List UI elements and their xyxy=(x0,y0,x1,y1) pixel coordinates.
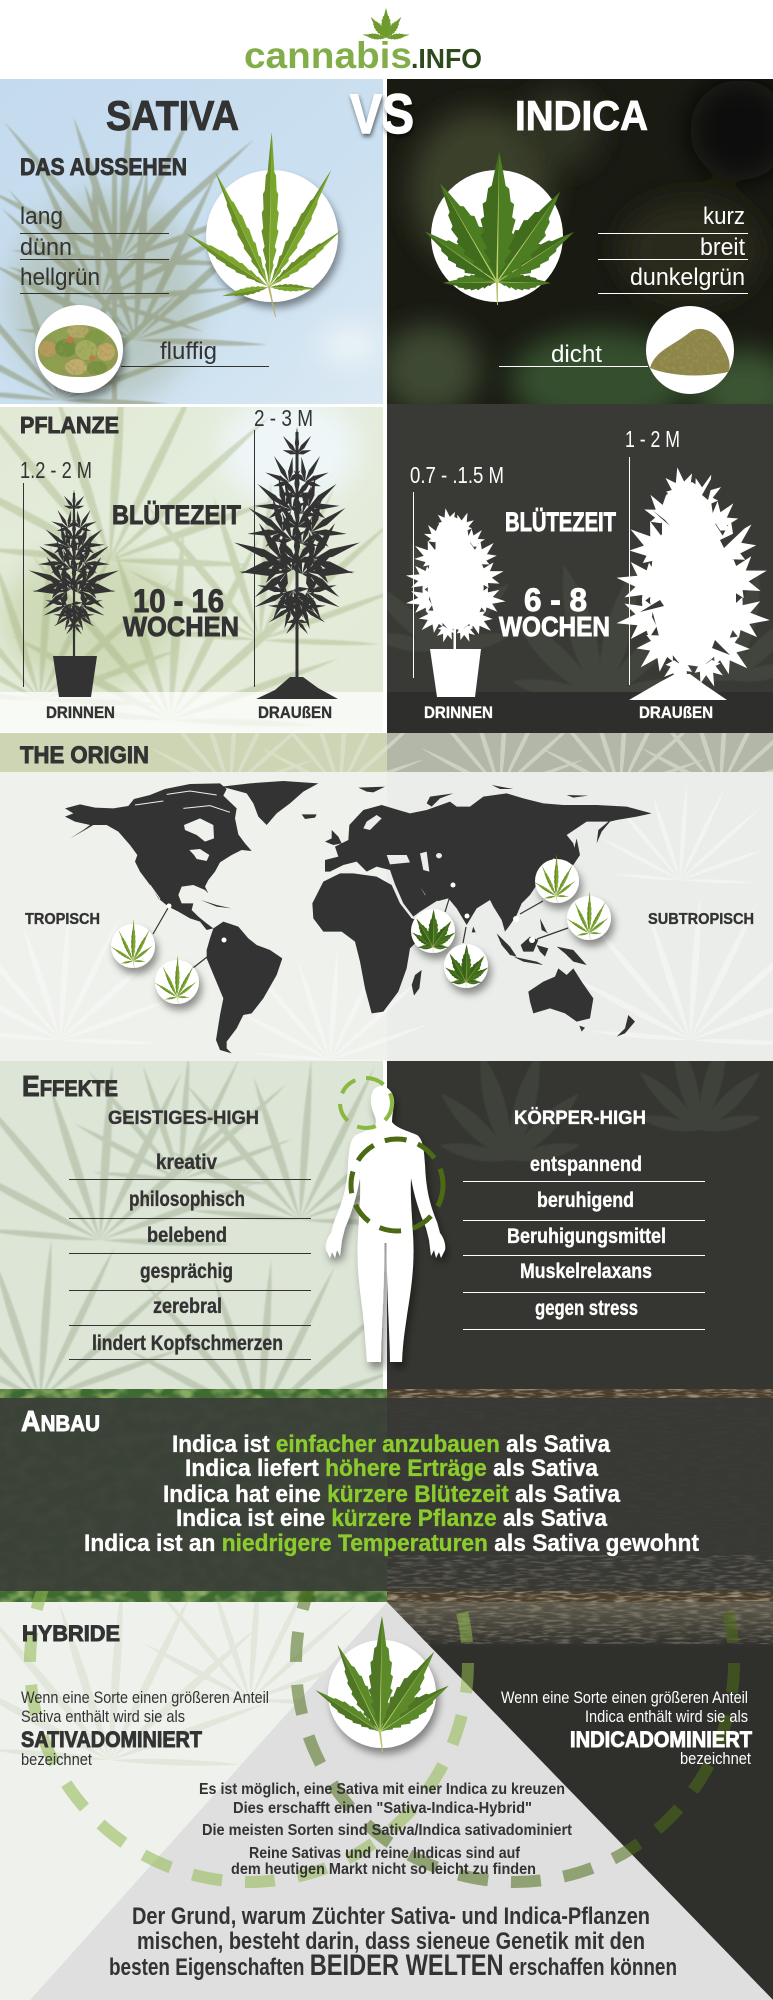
illustration: outdoor indica xyxy=(613,464,773,700)
text: conclusion: besten Eigenschaften BEIDER WELTEN erschaffen können xyxy=(109,1949,677,1982)
illustration: outdoor sativa xyxy=(224,427,370,699)
label: draussen: DRAUßEN xyxy=(258,703,332,722)
text: conclusion: mischen, besteht darin, dass sieneue Genetik mit den xyxy=(137,1928,645,1955)
icon: hybrid leaf xyxy=(312,1616,454,1752)
text: indica dominant: bezeichnet xyxy=(680,1749,751,1768)
marker: sativa asia 1 xyxy=(533,854,579,904)
label: drinnen: DRINNEN xyxy=(46,703,115,722)
text: sativa dominant xyxy=(21,1688,269,1769)
icon: sativa bud xyxy=(35,305,123,393)
label: drinnen: DRINNEN xyxy=(424,703,493,722)
panel: effects indica xyxy=(387,1033,773,1389)
illustration: human figure xyxy=(326,1078,445,1362)
item: kreativ: kreativ xyxy=(156,1151,217,1174)
logo xyxy=(244,8,482,76)
text line 1: Indica ist einfacher anzubauen als Sativa xyxy=(172,1431,611,1458)
panel: sativa plant xyxy=(0,407,383,732)
text: hybrid explanation xyxy=(199,1781,573,1878)
marker: indica 1 xyxy=(410,909,457,954)
heading: sativa: SATIVA xyxy=(106,92,239,139)
item: entspannend: entspannend xyxy=(530,1153,642,1176)
label: wochen: WOCHEN xyxy=(499,611,610,642)
text: hybrid explanation: Dies erschafft einen "Sativa-Indica-Hybrid" xyxy=(233,1800,532,1817)
label: hellgruen: hellgrün xyxy=(20,264,100,291)
text: hybrid explanation: dem heutigen Markt nicht so leicht zu finden xyxy=(231,1861,536,1878)
label: tropisch: TROPISCH xyxy=(25,911,100,928)
panel: effects sativa xyxy=(0,1052,442,1427)
text line 5: Indica ist an niedrigere Temperaturen als Sativa gewohnt xyxy=(84,1530,699,1557)
text: sativa dominant: SATIVADOMINIERT xyxy=(21,1727,202,1752)
panel: sativa appearance xyxy=(0,79,383,406)
heading: koerper high: KÖRPER-HIGH xyxy=(514,1108,646,1129)
region: sativa side xyxy=(0,1602,387,2000)
text line 4: Indica ist eine kürzere Pflanze als Sativa xyxy=(176,1505,608,1532)
panel: anbau xyxy=(0,1398,773,1591)
item: beruhigungsmittel: Beruhigungsmittel xyxy=(507,1225,666,1248)
heading: geistiges high: GEISTIGES-HIGH xyxy=(108,1108,259,1129)
item: gegen stress: gegen stress xyxy=(535,1297,638,1320)
item: zerebral: zerebral xyxy=(153,1295,222,1318)
marker: sativa americas 1 xyxy=(110,919,155,969)
number: 6-8: 6 - 8 xyxy=(524,582,587,618)
heading: effekte: EFFEKTE xyxy=(22,1071,118,1103)
text: sativa dominant: Wenn eine Sorte einen größeren Anteil xyxy=(21,1688,269,1707)
heading: VS: VS xyxy=(350,82,414,145)
label: dunkelgruen: dunkelgrün xyxy=(630,264,745,291)
text: indica dominant: INDICADOMINIERT xyxy=(570,1727,753,1752)
text: hybrid explanation: Reine Sativas und reine Indicas sind auf xyxy=(249,1845,521,1862)
label: lang: lang xyxy=(20,203,63,230)
text: sativa dominant: Sativa enthält wird sie als xyxy=(21,1707,185,1726)
heading: bluetezeit: BLÜTEZEIT xyxy=(505,507,616,537)
strip: labels indica xyxy=(387,692,773,733)
heading: bluetezeit: BLÜTEZEIT xyxy=(112,500,241,530)
label: subtropisch: SUBTROPISCH xyxy=(648,911,754,928)
height label: 1.2-2 M: 1.2 - 2 M xyxy=(20,457,92,483)
height label: 0.7-1.5 M: 0.7 - .1.5 M xyxy=(410,462,504,488)
text: hybrid explanation: Es ist möglich, eine Sativa mit einer Indica zu kreuzen xyxy=(199,1781,565,1798)
heading: anbau: ANBAU xyxy=(21,1406,100,1438)
panel: indica plant xyxy=(365,404,773,733)
region: blend triangle xyxy=(30,1602,773,2000)
height label: 2-3 M: 2 - 3 M xyxy=(254,405,313,431)
logo text: cannabis xyxy=(244,35,412,76)
map: americas xyxy=(65,781,318,1053)
heading: indica: INDICA xyxy=(515,92,648,139)
map: africa, eurasia and oceania xyxy=(312,785,652,1037)
label: draussen: DRAUßEN xyxy=(639,703,713,722)
number: 10-16: 10 - 16 xyxy=(133,583,224,619)
ring: head xyxy=(340,1078,392,1128)
text line 2: Indica liefert höhere Erträge als Sativa xyxy=(185,1455,599,1482)
panel: indica appearance xyxy=(380,79,773,430)
logo: .INFO xyxy=(411,43,482,74)
text line 3: Indica hat eine kürzere Blütezeit als Sativa xyxy=(163,1481,621,1508)
heading: das aussehen: DAS AUSSEHEN xyxy=(20,154,187,181)
band: green foliage strip xyxy=(0,1389,773,1602)
text: sativa dominant: bezeichnet xyxy=(21,1750,92,1769)
text: indica dominant: Indica enthält wird sie als xyxy=(585,1707,748,1726)
marker: indica 2 xyxy=(443,944,490,989)
heading: hybride: HYBRIDE xyxy=(22,1621,120,1646)
text: conclusion xyxy=(109,1903,677,1982)
illustration: indoor sativa xyxy=(21,490,127,697)
dashed circle: sativa xyxy=(24,1591,474,1888)
label: fluffig: fluffig xyxy=(160,338,217,365)
panel: hybride xyxy=(0,1591,773,2000)
marker: sativa asia 2 xyxy=(566,891,611,941)
item: gespraechig: gesprächig xyxy=(140,1260,233,1283)
label: kurz: kurz xyxy=(703,203,745,230)
item: beruhigend: beruhigend xyxy=(537,1189,634,1212)
icon: indica leaf in circle xyxy=(419,152,580,305)
dashed circle: indica xyxy=(290,1591,740,1888)
label: dicht: dicht xyxy=(551,341,602,368)
panel: world map xyxy=(0,772,773,1065)
icon: sativa leaf in circle xyxy=(183,132,345,317)
text: indica dominant xyxy=(501,1688,753,1768)
icon: indica bud xyxy=(646,306,734,394)
illustration: indoor indica xyxy=(403,506,507,697)
marker: sativa americas 2 xyxy=(154,955,199,1005)
ring: body xyxy=(351,1139,443,1231)
heading: the origin: THE ORIGIN xyxy=(20,742,149,769)
label: duenn: dünn xyxy=(20,234,72,261)
label: wochen: WOCHEN xyxy=(123,611,239,642)
item: muskelrelaxans: Muskelrelaxans xyxy=(520,1260,652,1283)
heading: pflanze: PFLANZE xyxy=(20,412,119,438)
label: breit: breit xyxy=(700,234,745,261)
band: the origin heading xyxy=(0,733,773,772)
strip: labels sativa xyxy=(0,692,383,732)
region: indica side xyxy=(387,1602,773,2000)
text: hybrid explanation: Die meisten Sorten sind Sativa/Indica sativadominiert xyxy=(202,1822,573,1839)
logo leaf xyxy=(362,8,410,41)
item: philosophisch: philosophisch xyxy=(129,1188,245,1211)
text: conclusion: Der Grund, warum Züchter Sativa- und Indica-Pflanzen xyxy=(132,1903,650,1930)
height label: 1-2 M: 1 - 2 M xyxy=(625,426,680,452)
item: lindert kopfschmerzen: lindert Kopfschmerzen xyxy=(92,1332,283,1355)
item: belebend: belebend xyxy=(147,1224,227,1247)
